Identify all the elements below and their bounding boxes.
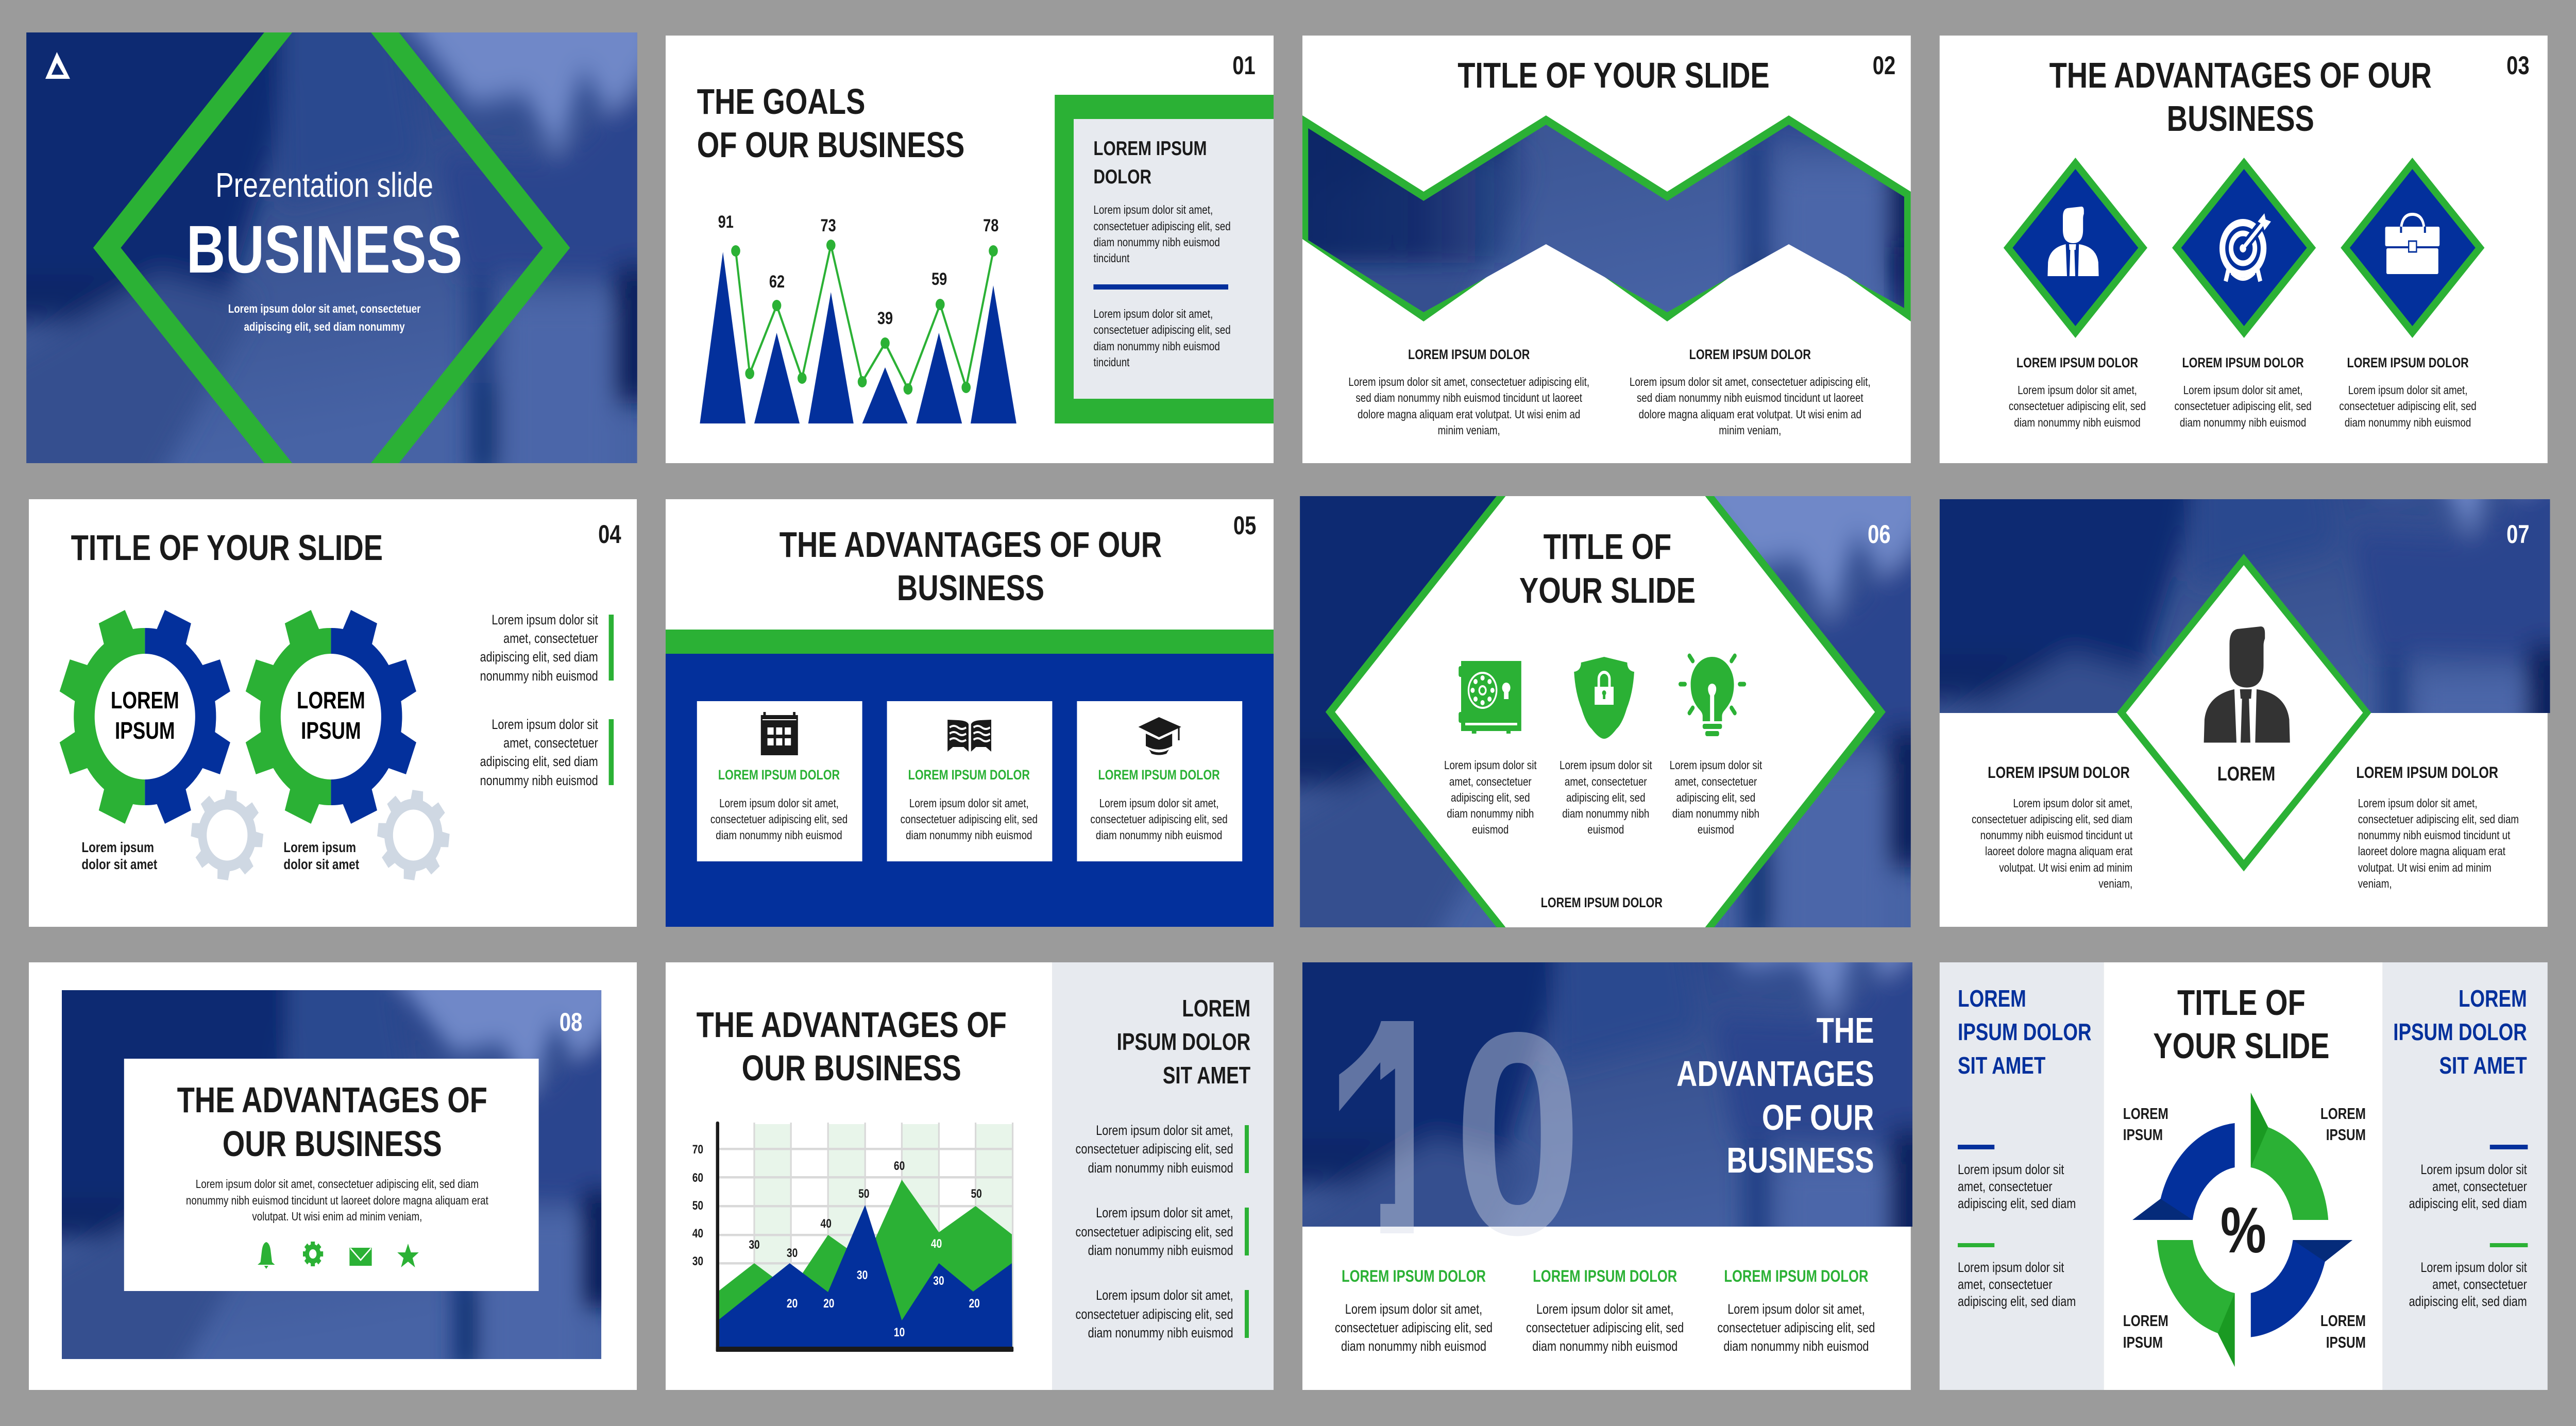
card heading: LOREM IPSUM DOLOR: [1098, 768, 1220, 783]
panel: slide 07 person: [1939, 499, 2550, 927]
green accent bar one: [1245, 1125, 1249, 1173]
column three text: euismod: [1698, 823, 1734, 837]
panel: slide 08 framed: [29, 962, 637, 1390]
panel text one: Lorem ipsum dolor sit amet,: [1093, 203, 1213, 217]
card text: consectetuer adipiscing elit, sed: [1090, 812, 1228, 826]
heading: TITLE OF YOUR SLIDE: [1458, 56, 1770, 95]
gear one caption: dolor sit amet: [81, 857, 158, 873]
gear one: IPSUM: [115, 717, 175, 744]
triangle chart: 62: [769, 271, 785, 292]
column one text: Lorem ipsum dolor sit amet,: [1345, 1302, 1482, 1317]
column one text: diam nonummy nibh: [1447, 807, 1534, 821]
right text two: amet, consectetuer: [2432, 1277, 2527, 1293]
side text two: diam nonummy nibh euismod: [1088, 1243, 1233, 1259]
column three text: consectetuer adipiscing elit, sed: [2339, 399, 2477, 413]
slide background: [29, 962, 637, 1390]
left text: Lorem ipsum dolor sit amet,: [2013, 796, 2132, 810]
triangle chart: [700, 212, 1016, 423]
side text one: nonummy nibh euismod: [480, 669, 598, 684]
column two text: sed diam nonummy nibh euismod tincidunt ut laoreet: [1637, 391, 1863, 405]
slide photo: [1275, 465, 1930, 960]
column one text: Lorem ipsum dolor sit: [1444, 758, 1537, 772]
right heading: LOREM: [2459, 985, 2527, 1012]
gear two: [246, 610, 416, 824]
label top right: IPSUM: [2326, 1126, 2366, 1144]
side text two: Lorem ipsum dolor sit: [492, 717, 598, 733]
panel text two: tincidunt: [1093, 355, 1129, 369]
card text: consectetuer adipiscing elit, sed: [710, 812, 848, 826]
cover title: BUSINESS: [187, 212, 462, 287]
right text: consectetuer adipiscing elit, sed diam: [2358, 812, 2519, 826]
gear two: IPSUM: [301, 717, 361, 744]
diamond label: LOREM: [2217, 763, 2275, 785]
center heading: TITLE OF: [2177, 983, 2306, 1023]
white lower area: [1940, 713, 2548, 927]
area chart: 30: [787, 1246, 798, 1260]
side text one: amet, consectetuer: [503, 631, 598, 647]
panel text one: consectetuer adipiscing elit, sed: [1093, 219, 1231, 233]
panel: slide 06 hexagon: [1275, 465, 1930, 960]
panel: slide 10 big number: [1302, 962, 1912, 1390]
gear one: [60, 610, 230, 824]
right green bar: [2490, 1243, 2528, 1247]
column one text: diam nonummy nibh euismod: [1341, 1339, 1486, 1354]
column three text: diam nonummy nibh euismod: [1723, 1339, 1869, 1354]
card text: Lorem ipsum dolor sit amet,: [719, 796, 839, 810]
side text three: diam nonummy nibh euismod: [1088, 1326, 1233, 1341]
slide background: [666, 499, 1274, 630]
left text one: Lorem ipsum dolor sit: [1958, 1162, 2064, 1178]
triangle chart: 78: [983, 215, 998, 235]
icon: calendar: [761, 712, 798, 755]
left blue bar: [1958, 1145, 1994, 1149]
column two text: diam nonummy nibh: [1562, 807, 1649, 821]
column one text: euismod: [1472, 823, 1509, 837]
column one text: diam nonummy nibh euismod: [2014, 416, 2141, 430]
area chart: [692, 1122, 1013, 1352]
column two text: minim veniam,: [1719, 423, 1781, 437]
column two heading: LOREM IPSUM DOLOR: [2182, 355, 2304, 371]
column two text: consectetuer adipiscing elit, sed: [2174, 399, 2312, 413]
cover photo: [2, 2, 657, 496]
side text two: amet, consectetuer: [503, 736, 598, 751]
card text: diam nonummy nibh euismod: [716, 828, 842, 842]
slide background: [666, 36, 1274, 463]
right blue bar: [2490, 1145, 2528, 1149]
card two: [887, 701, 1052, 861]
icon: briefcase diamond: [2341, 158, 2484, 338]
heading: THE GOALS: [697, 82, 865, 122]
heading: THE ADVANTAGES OF OUR: [2049, 56, 2432, 95]
icon: businessman: [2204, 626, 2290, 742]
slide number: 03: [2506, 51, 2530, 80]
footer heading: LOREM IPSUM DOLOR: [1541, 895, 1663, 911]
gear one caption: Lorem ipsum: [81, 840, 154, 856]
green accent bar two: [1245, 1208, 1249, 1255]
column one text: Lorem ipsum dolor sit amet, consectetuer adipiscing elit,: [1348, 375, 1589, 389]
panel text one: diam nonummy nibh euismod: [1093, 235, 1220, 249]
label bottom left: LOREM: [2123, 1312, 2168, 1330]
center heading: YOUR SLIDE: [2153, 1026, 2329, 1066]
column three heading: LOREM IPSUM DOLOR: [2347, 355, 2469, 371]
slide background: [1302, 1227, 1911, 1390]
column one text: adipiscing elit, sed: [1451, 791, 1530, 805]
column two text: Lorem ipsum dolor sit: [1560, 758, 1652, 772]
area chart: 30: [692, 1254, 703, 1268]
side text one: Lorem ipsum dolor sit: [492, 613, 598, 628]
slide photo: [1302, 962, 1912, 1227]
triangle chart: 91: [718, 212, 734, 232]
slide number: 05: [1233, 511, 1256, 540]
icon: star: [397, 1244, 419, 1267]
column one text: consectetuer adipiscing elit, sed: [1335, 1320, 1493, 1336]
area chart: 40: [821, 1216, 832, 1231]
left green bar: [1958, 1243, 1994, 1247]
heading: OF OUR BUSINESS: [697, 125, 964, 165]
slide background: [1302, 36, 1911, 463]
left heading: IPSUM DOLOR: [1958, 1018, 2092, 1045]
heading: THE ADVANTAGES OF: [697, 1005, 1007, 1045]
green diamond: [2117, 554, 2371, 872]
small grey gear one: [191, 790, 263, 880]
area chart: 50: [692, 1198, 703, 1213]
column three text: adipiscing elit, sed: [1676, 791, 1755, 805]
panel: slide 05 cards: [666, 499, 1274, 927]
grey side panel: [1052, 962, 1274, 1390]
heading: THE ADVANTAGES OF OUR: [779, 525, 1162, 565]
large number 10: [1339, 1021, 1572, 1236]
gear two caption: dolor sit amet: [283, 857, 360, 873]
panel text one: tincidunt: [1093, 251, 1129, 265]
right text two: adipiscing elit, sed diam: [2409, 1294, 2527, 1310]
green accent bar two: [609, 719, 614, 785]
blue divider bar: [1093, 284, 1228, 290]
card text: Lorem ipsum dolor sit amet,: [1099, 796, 1218, 810]
area chart: 60: [894, 1159, 905, 1173]
area chart: 50: [858, 1186, 869, 1201]
slide number: 04: [598, 520, 621, 549]
side text one: adipiscing elit, sed diam: [480, 650, 598, 665]
zigzag photo: [1308, 125, 1904, 312]
label top right: LOREM: [2320, 1105, 2366, 1123]
left text: volutpat. Ut wisi enim ad minim: [1999, 861, 2132, 875]
column one text: consectetuer adipiscing elit, sed: [2009, 399, 2146, 413]
card three: [1077, 701, 1242, 861]
panel heading: LOREM IPSUM: [1093, 138, 1207, 160]
large number 10: 1: [1341, 973, 1469, 1295]
panel: slide 09 area chart: [666, 962, 1274, 1390]
icon: bell: [258, 1242, 275, 1269]
column two text: Lorem ipsum dolor sit amet,: [1536, 1302, 1673, 1317]
area chart: 20: [787, 1296, 798, 1311]
right grey panel: [2383, 962, 2548, 1390]
heading: THE ADVANTAGES OF: [177, 1080, 487, 1120]
white hexagon: [1335, 496, 1875, 927]
panel: slide 03 advantages: [1940, 36, 2548, 463]
side heading: LOREM: [1182, 995, 1250, 1022]
card text: consectetuer adipiscing elit, sed: [901, 812, 1038, 826]
area chart: 30: [933, 1274, 944, 1288]
body text: nonummy nibh euismod tincidunt ut laoreet dolore magna aliquam erat: [186, 1194, 488, 1208]
heading: YOUR SLIDE: [1519, 571, 1696, 610]
label top left: LOREM: [2123, 1105, 2168, 1123]
side heading: SIT AMET: [1163, 1062, 1250, 1089]
column three text: diam nonummy nibh euismod: [2345, 416, 2471, 430]
triangle chart: 39: [877, 308, 893, 328]
icon: safe: [1459, 661, 1521, 734]
left heading: SIT AMET: [1958, 1052, 2045, 1079]
left text two: adipiscing elit, sed diam: [1958, 1294, 2076, 1310]
icon: gear: [303, 1242, 323, 1266]
heading: OUR BUSINESS: [742, 1048, 961, 1088]
column two text: diam nonummy nibh euismod: [2180, 416, 2306, 430]
area chart: 70: [692, 1142, 703, 1157]
area chart: 20: [823, 1296, 834, 1311]
body text: Lorem ipsum dolor sit amet, consectetuer adipiscing elit, sed diam: [196, 1177, 479, 1191]
column three text: Lorem ipsum dolor sit: [1670, 758, 1762, 772]
icon: target diamond: [2172, 158, 2316, 338]
card text: diam nonummy nibh euismod: [906, 828, 1032, 842]
heading: OF OUR: [1762, 1098, 1874, 1138]
column two text: diam nonummy nibh euismod: [1532, 1339, 1677, 1354]
green band: [666, 630, 1274, 654]
panel text two: Lorem ipsum dolor sit amet,: [1093, 307, 1213, 321]
large number 10: 0: [1454, 973, 1582, 1295]
panel: slide 04 gears: [29, 499, 637, 927]
triangle chart: 59: [931, 269, 947, 289]
side text one: Lorem ipsum dolor sit amet,: [1096, 1123, 1233, 1139]
right text one: Lorem ipsum dolor sit: [2420, 1162, 2527, 1178]
slide background: [29, 499, 637, 927]
column two text: euismod: [1587, 823, 1624, 837]
icon: person diamond: [2004, 158, 2147, 338]
right text: veniam,: [2358, 877, 2392, 891]
side text two: nonummy nibh euismod: [480, 773, 598, 789]
column three heading: LOREM IPSUM DOLOR: [1724, 1267, 1869, 1286]
cover description: adipiscing elit, sed diam nonummy: [244, 320, 405, 334]
slide number: 08: [560, 1008, 582, 1037]
right text one: adipiscing elit, sed diam: [2409, 1196, 2527, 1212]
card heading: LOREM IPSUM DOLOR: [908, 768, 1030, 783]
column three text: consectetuer adipiscing elit, sed: [1717, 1320, 1875, 1336]
gear one: LOREM: [111, 687, 179, 714]
column one text: dolore magna aliquam erat volutpat. Ut wisi enim ad: [1358, 408, 1580, 421]
grey inner panel: [1074, 119, 1274, 399]
column two text: adipiscing elit, sed: [1566, 791, 1646, 805]
column one heading: LOREM IPSUM DOLOR: [1408, 347, 1530, 363]
side text three: Lorem ipsum dolor sit amet,: [1096, 1288, 1233, 1303]
side text two: Lorem ipsum dolor sit amet,: [1096, 1206, 1233, 1221]
slide background: [666, 962, 1052, 1390]
panel text two: consectetuer adipiscing elit, sed: [1093, 323, 1231, 337]
cover description: Lorem ipsum dolor sit amet, consectetuer: [228, 302, 420, 316]
card heading: LOREM IPSUM DOLOR: [718, 768, 840, 783]
column two text: Lorem ipsum dolor sit amet,: [2183, 383, 2302, 397]
icon: graduation cap: [1139, 717, 1181, 755]
blue band: [666, 654, 1274, 927]
left text one: amet, consectetuer: [1958, 1179, 2053, 1195]
column one text: Lorem ipsum dolor sit amet,: [2018, 383, 2137, 397]
column two heading: LOREM IPSUM DOLOR: [1689, 347, 1811, 363]
green accent bar three: [1245, 1290, 1249, 1338]
side text one: consectetuer adipiscing elit, sed: [1076, 1142, 1233, 1157]
area chart: 30: [857, 1268, 868, 1282]
area chart: 30: [749, 1237, 760, 1252]
triangle chart: 73: [820, 215, 836, 235]
label bottom right: LOREM: [2320, 1312, 2366, 1330]
heading: OUR BUSINESS: [223, 1124, 442, 1164]
left text: nonummy nibh euismod tincidunt ut: [1980, 828, 2132, 842]
slide background: [1940, 36, 2548, 463]
gear two: LOREM: [297, 687, 365, 714]
small grey gear two: [377, 790, 450, 880]
heading: BUSINESS: [1726, 1141, 1874, 1180]
card one: [697, 701, 862, 861]
side text one: diam nonummy nibh euismod: [1088, 1161, 1233, 1176]
column two text: amet, consectetuer: [1565, 775, 1647, 789]
slide number: 07: [2506, 520, 2530, 549]
panel: slide 02 zigzag: [1302, 36, 1911, 463]
area chart: 40: [931, 1236, 942, 1251]
area chart: 10: [894, 1325, 905, 1339]
right text: Lorem ipsum dolor sit amet,: [2358, 796, 2478, 810]
percent ring chart: [2132, 1093, 2352, 1367]
column three text: diam nonummy nibh: [1672, 807, 1759, 821]
panel text two: diam nonummy nibh euismod: [1093, 339, 1220, 353]
card text: Lorem ipsum dolor sit amet,: [909, 796, 1029, 810]
right text two: Lorem ipsum dolor sit: [2420, 1260, 2527, 1276]
side text two: adipiscing elit, sed diam: [480, 754, 598, 770]
left heading: LOREM: [1958, 985, 2026, 1012]
column two text: dolore magna aliquam erat volutpat. Ut wisi enim ad: [1639, 408, 1861, 421]
slide background: [2104, 962, 2383, 1390]
left text: veniam,: [2098, 877, 2132, 891]
label top left: IPSUM: [2123, 1126, 2163, 1144]
panel: slide cover: [2, 2, 657, 496]
gear two caption: Lorem ipsum: [283, 840, 356, 856]
left text: consectetuer adipiscing elit, sed diam: [1972, 812, 2132, 826]
label bottom left: IPSUM: [2123, 1333, 2163, 1351]
card text: diam nonummy nibh euismod: [1096, 828, 1222, 842]
green hexagon outline: [1326, 496, 1886, 927]
right text: nonummy nibh euismod tincidunt ut: [2358, 828, 2510, 842]
right text: laoreet dolore magna aliquam erat: [2358, 844, 2505, 858]
right heading: IPSUM DOLOR: [2393, 1018, 2527, 1045]
column one heading: LOREM IPSUM DOLOR: [1342, 1267, 1486, 1286]
heading: ADVANTAGES: [1676, 1054, 1874, 1094]
column one text: sed diam nonummy nibh euismod tincidunt ut laoreet: [1355, 391, 1582, 405]
left grey panel: [1940, 962, 2104, 1390]
right text one: amet, consectetuer: [2432, 1179, 2527, 1195]
heading: THE: [1817, 1011, 1874, 1050]
panel heading: DOLOR: [1093, 166, 1151, 188]
left text two: Lorem ipsum dolor sit: [1958, 1260, 2064, 1276]
panel: slide 11 percent ring: [1940, 962, 2548, 1390]
column two heading: LOREM IPSUM DOLOR: [1533, 1267, 1677, 1286]
white diamond: [2126, 565, 2363, 860]
icon: open book: [947, 720, 991, 752]
right heading: SIT AMET: [2439, 1052, 2527, 1079]
body text: volutpat. Ut wisi enim ad minim veniam,: [252, 1210, 422, 1224]
column one heading: LOREM IPSUM DOLOR: [2016, 355, 2138, 371]
right text: volutpat. Ut wisi enim ad minim: [2358, 861, 2492, 875]
column two text: Lorem ipsum dolor sit amet, consectetuer adipiscing elit,: [1630, 375, 1871, 389]
cover subtitle: Prezentation slide: [215, 165, 433, 204]
right heading: LOREM IPSUM DOLOR: [2356, 763, 2498, 782]
left text one: adipiscing elit, sed diam: [1958, 1196, 2076, 1212]
green zigzag band: [1302, 115, 1911, 321]
area chart: 20: [969, 1296, 980, 1311]
left heading: LOREM IPSUM DOLOR: [1988, 763, 2130, 782]
white text box: [124, 1059, 539, 1291]
heading: TITLE OF: [1544, 527, 1671, 567]
slide number: 01: [1232, 51, 1256, 80]
slide number: 06: [1868, 520, 1891, 549]
green frame panel: [1055, 95, 1274, 423]
green accent bar one: [609, 615, 614, 681]
column three text: Lorem ipsum dolor sit amet,: [2348, 383, 2467, 397]
percent ring chart: %: [2221, 1194, 2266, 1266]
panel: slide 01 goals: [666, 36, 1274, 463]
heading: TITLE OF YOUR SLIDE: [71, 528, 383, 568]
column two text: consectetuer adipiscing elit, sed: [1526, 1320, 1684, 1336]
column three text: amet, consectetuer: [1675, 775, 1757, 789]
area chart: 40: [692, 1226, 703, 1241]
area chart: 60: [692, 1170, 703, 1185]
column one text: minim veniam,: [1438, 423, 1500, 437]
side heading: IPSUM DOLOR: [1117, 1028, 1250, 1055]
icon: logo triangle: [45, 52, 70, 79]
left text two: amet, consectetuer: [1958, 1277, 2053, 1293]
side text two: consectetuer adipiscing elit, sed: [1076, 1225, 1233, 1240]
side text three: consectetuer adipiscing elit, sed: [1076, 1307, 1233, 1322]
icon: envelope: [349, 1248, 372, 1266]
heading: BUSINESS: [897, 568, 1044, 608]
icon: shield lock: [1574, 657, 1634, 739]
label bottom right: IPSUM: [2326, 1333, 2366, 1351]
green diamond frame: [93, 32, 570, 463]
area chart: 50: [971, 1186, 982, 1201]
column three text: Lorem ipsum dolor sit amet,: [1727, 1302, 1865, 1317]
slide photo: [40, 964, 619, 1387]
slide photo: [1939, 499, 2550, 713]
icon: light bulb: [1681, 656, 1744, 736]
left text: laoreet dolore magna aliquam erat: [1985, 844, 2132, 858]
heading: BUSINESS: [2167, 99, 2314, 139]
slide number: 02: [1873, 51, 1895, 80]
column one text: amet, consectetuer: [1449, 775, 1532, 789]
